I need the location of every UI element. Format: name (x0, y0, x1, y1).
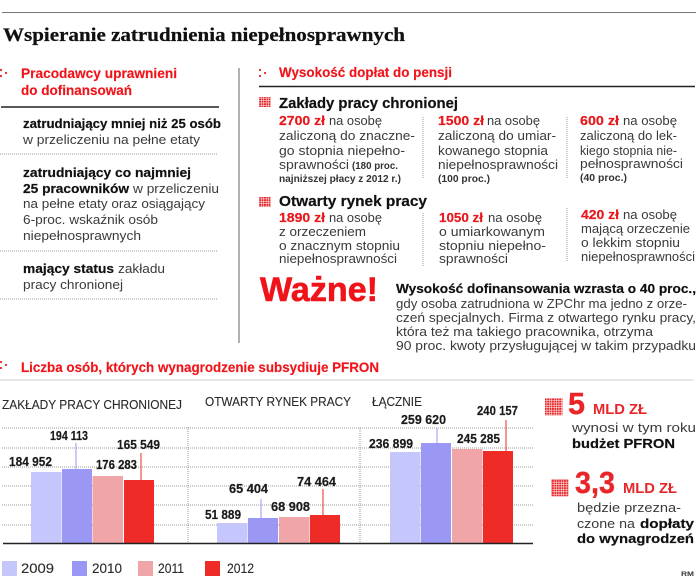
figure: 5 mld zł: 5 (568, 386, 585, 421)
text block: sheltered status (23, 261, 165, 292)
stat description: wynosi w tym roku (571, 420, 696, 435)
text block: 1500 zł: (100 proc.) (438, 173, 490, 185)
icon: red dots (0, 69, 7, 77)
stat description (571, 420, 696, 451)
icon: dot grid (545, 398, 562, 416)
stat description: będzie przezna- (577, 500, 681, 515)
value labels: 240 157 (477, 403, 518, 418)
value labels: 245 285 (457, 431, 500, 446)
text block: 1050 zł: 1050 zł (439, 210, 483, 225)
value labels: 236 899 (369, 436, 413, 451)
stat description: do wynagrodzeń (577, 531, 694, 546)
value labels: 259 620 (401, 412, 446, 427)
value labels (9, 403, 518, 522)
legend: 2012 (227, 560, 254, 576)
bars: total (390, 420, 513, 544)
heading: number of people: Liczba osób, których wynagrodzenie subsydiuje PFRON (21, 359, 379, 375)
callout: important (260, 271, 696, 353)
figure: 5 mld zł (568, 386, 647, 421)
chart: bar chart of subsidised people (2, 395, 533, 576)
text block: 1050 zł: o umiarkowanym (439, 224, 545, 239)
text block: 600 zł: kiego stopnia nie- (580, 143, 677, 158)
text block: 1890 zł: niepełnosprawności (279, 251, 397, 266)
value labels: 176 283 (96, 457, 137, 472)
text block: 420 zł: na osobę (623, 207, 677, 222)
stat: wage subsidies (551, 465, 695, 546)
text block: under 25 employees: w przeliczeniu na pełne etaty (22, 132, 201, 147)
text block: 1890 zł: z orzeczeniem (279, 224, 366, 239)
text block: under 25 employees (22, 116, 221, 147)
text block: at least 25 employees: niepełnosprawnych (23, 228, 141, 243)
chart titles: ZAKŁADY PRACY CHRONIONEJ (2, 398, 182, 412)
text block: 1500 zł: niepełnosprawności (438, 157, 558, 172)
text block: 1050 zł: stopniu niepełno- (439, 238, 546, 253)
text block: 420 zł: niepełnosprawności (581, 249, 695, 264)
text block: at least 25 employees: zatrudniający co najmniej (23, 165, 191, 180)
stat description (577, 500, 695, 546)
heading: eligible employers (21, 65, 177, 98)
callout text: która też ma takiego pracownika, otrzyma (396, 324, 654, 339)
callout heading: Ważne! (260, 271, 378, 309)
text block: sheltered status: mający status (23, 261, 114, 276)
text block: 1890 zł (279, 210, 400, 266)
text block: at least 25 employees: 25 pracowników (23, 181, 130, 196)
text block: 1050 zł (439, 210, 546, 266)
value labels: 65 404 (229, 481, 269, 496)
stat: PFRON budget (545, 386, 696, 451)
text block: 1050 zł: sprawności (439, 251, 508, 266)
text block: 2700 zł: sprawności (279, 157, 349, 172)
figure: 3,3 mld zł (575, 465, 677, 500)
text block: under 25 employees: zatrudniający mniej niż 25 osób (23, 116, 221, 131)
value labels: 165 549 (117, 437, 160, 452)
text block: 1890 zł: o znacznym stopniu (279, 238, 400, 253)
text block: 420 zł (581, 207, 695, 264)
text block: at least 25 employees: 6-proc. wskaźnik osób (23, 212, 158, 227)
text block: 600 zł (580, 113, 683, 184)
bars: open labour market (217, 489, 340, 544)
legend: 2010 (92, 560, 122, 576)
bars: sheltered workplaces (31, 443, 154, 544)
subheading: open labour market: Otwarty rynek pracy (279, 193, 428, 210)
callout text: gdy osoba zatrudniona w ZPChr ma jedno z orze- (396, 296, 687, 311)
panel: eligible employers (0, 65, 221, 299)
callout text: Wysokość dofinansowania wzrasta o 40 proc., (396, 281, 696, 296)
text block: 1500 zł (438, 113, 558, 185)
title: Wspieranie zatrudnienia niepełnosprawnych (3, 25, 405, 46)
stat description: budżet PFRON (572, 436, 675, 451)
text block: at least 25 employees (23, 165, 219, 243)
text block: 600 zł: (40 proc.) (580, 172, 627, 184)
figure: 3,3 mld zł: 3,3 (575, 465, 615, 500)
figure: 3,3 mld zł: MLD ZŁ (623, 480, 677, 497)
value labels: 68 908 (271, 499, 310, 514)
callout text: 90 proc. kwoty przysługującej w takim przypadku (396, 338, 696, 353)
heading: eligible employers: do dofinansowań (21, 82, 132, 98)
text block: 1890 zł: 1890 zł (279, 210, 325, 225)
text block: 1500 zł: 1500 zł (438, 113, 484, 128)
text block: 420 zł: mającą orzeczenie (581, 221, 690, 236)
icon: dot grid (259, 197, 270, 207)
text block: at least 25 employees: na pełne etaty oraz osiągający (23, 196, 206, 211)
text block: sheltered status: zakładu (118, 261, 165, 276)
text block: 600 zł: pełnosprawności (580, 156, 683, 171)
stat description: dopłaty (640, 516, 695, 531)
chart titles: OTWARTY RYNEK PRACY (205, 395, 352, 409)
heading: eligible employers: Pracodawcy uprawnieni (21, 65, 177, 81)
text block: 2700 zł: najniższej płacy z 2012 r.) (279, 173, 401, 185)
text block: 2700 zł: zaliczoną do znaczne- (279, 128, 415, 143)
text block: 2700 zł: (180 proc. (352, 160, 398, 172)
text block: 1500 zł: zaliczoną do umiar- (438, 128, 556, 143)
icon: red dots (0, 361, 7, 369)
text block: 1890 zł: na osobę (329, 210, 382, 225)
chart titles: ŁĄCZNIE (372, 395, 422, 409)
figure: 5 mld zł: MLD ZŁ (593, 401, 647, 418)
icon: dot grid (259, 97, 270, 107)
panel: subsidy amounts (259, 64, 695, 266)
value labels: 184 952 (9, 454, 52, 469)
icon: red dots (259, 69, 266, 77)
value labels: 194 113 (50, 428, 88, 443)
text block: 600 zł: na osobę (623, 113, 677, 128)
text block: 2700 zł (279, 113, 415, 185)
text block: 420 zł: o lekkim stopniu (581, 235, 680, 250)
chart titles (2, 395, 422, 412)
value labels: 74 464 (297, 474, 337, 489)
text block: 2700 zł: 2700 zł (279, 113, 325, 128)
callout text: czeń specjalnych. Firma z otwartego rynku pracy, (396, 310, 696, 325)
stat description: czone na (577, 516, 636, 531)
heading: subsidy amounts: Wysokość dopłat do pensji (279, 64, 452, 80)
text block: 600 zł: 600 zł (580, 113, 619, 128)
text block: 420 zł: 420 zł (581, 207, 619, 222)
icon: dot grid (551, 479, 568, 496)
callout text (396, 281, 696, 353)
text block: 1050 zł: na osobę (488, 210, 542, 225)
legend (2, 560, 254, 576)
value labels: 51 889 (205, 507, 241, 522)
legend: 2011 (158, 560, 184, 576)
legend: 2009 (21, 560, 54, 576)
text block: 2700 zł: go stopnia niepełno- (279, 143, 405, 158)
text block: 2700 zł: na osobę (329, 113, 382, 128)
subheading: sheltered workplaces: Zakłady pracy chronionej (279, 95, 458, 112)
text block: 1500 zł: kowanego stopnia (438, 143, 549, 158)
text block: 600 zł: zaliczoną do lek- (580, 128, 677, 143)
text block: at least 25 employees: w przeliczeniu (132, 181, 219, 196)
text block: sheltered status: pracy chronionej (23, 277, 123, 292)
text block: 1500 zł: na osobę (487, 113, 540, 128)
